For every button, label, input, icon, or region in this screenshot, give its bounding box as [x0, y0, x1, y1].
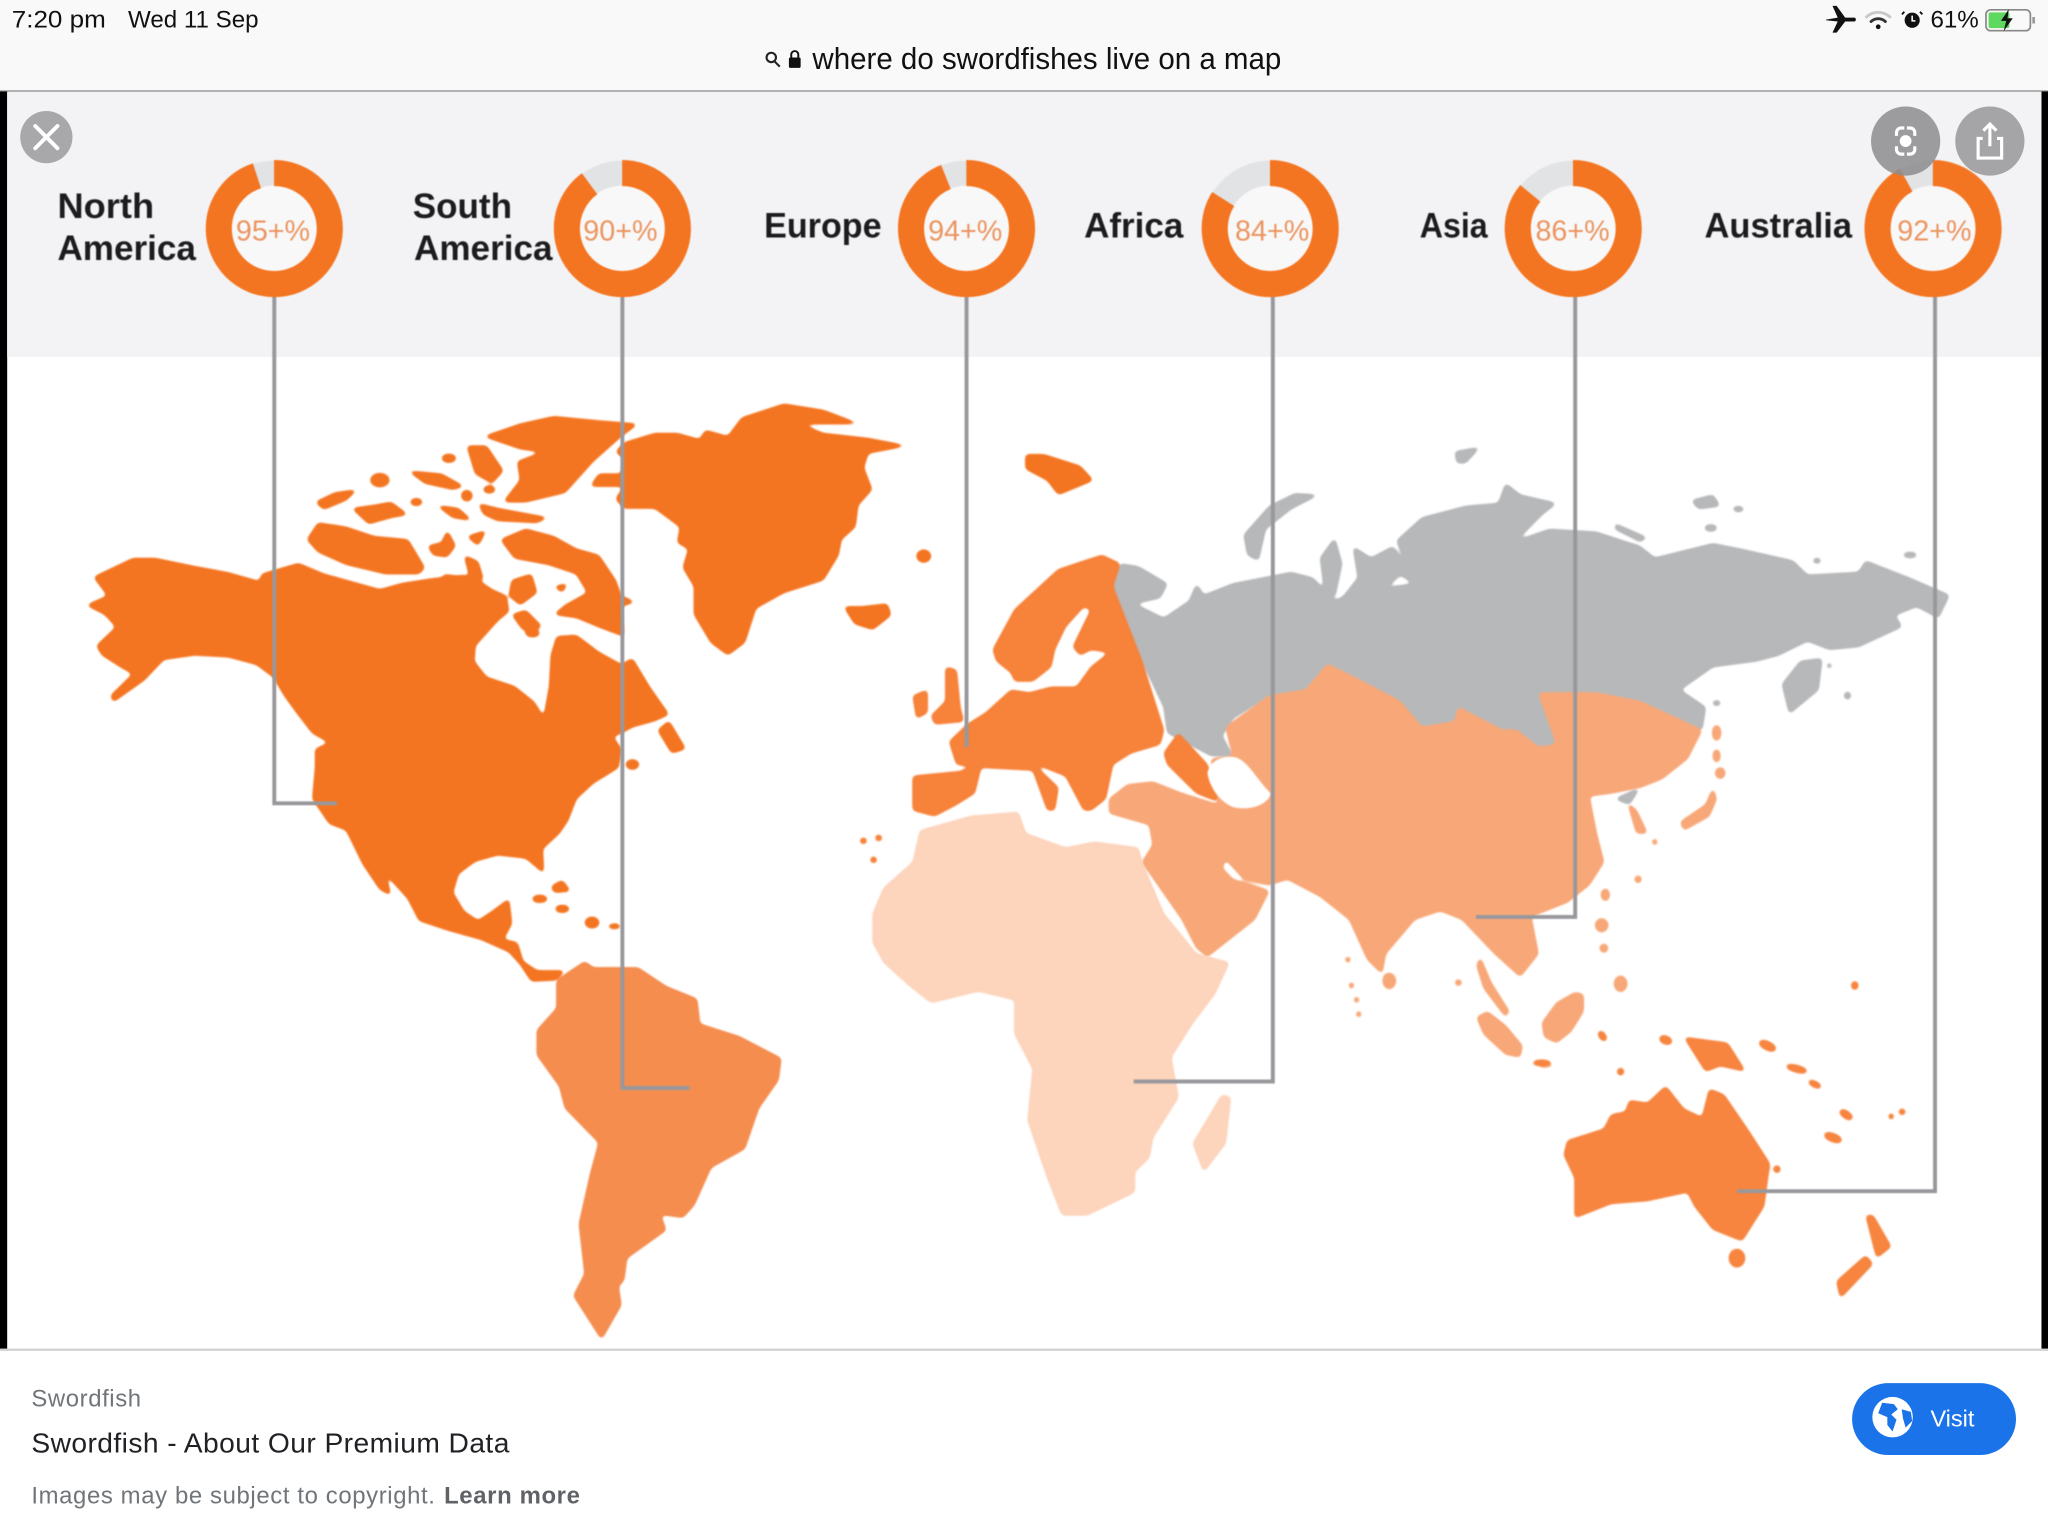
donut [567, 173, 678, 284]
footer panel [0, 1349, 2048, 1536]
region: South America [537, 961, 781, 1339]
copyright note: Learn more [444, 1482, 580, 1509]
stat: Africa [1084, 173, 1326, 284]
status time and date: 7:20 pm [12, 6, 106, 33]
button: visit [1852, 1383, 2016, 1455]
button: share [1955, 106, 2024, 176]
label: Asia [1420, 207, 1488, 246]
Newfoundland and Caribbean [532, 721, 686, 929]
donut: 84+% [1235, 215, 1309, 247]
Greenland [590, 404, 907, 655]
icon: airplane [1826, 6, 1856, 33]
icon: globe [1872, 1397, 1913, 1437]
region: Australia and Oceania [1532, 981, 1906, 1298]
label: South [413, 187, 512, 226]
label: Australia [1704, 207, 1852, 246]
icon: alarm [1902, 12, 1922, 28]
region: North America [86, 404, 907, 981]
icon: battery charging [1986, 9, 2035, 31]
icon: lock [789, 51, 801, 68]
world map [86, 404, 1949, 1339]
label: America [57, 229, 196, 268]
donut [219, 173, 330, 284]
label: Europe [764, 207, 882, 246]
donut: 86+% [1535, 215, 1610, 247]
connector lines [274, 295, 1935, 1191]
donut [911, 173, 1022, 284]
stat: Europe [764, 173, 1022, 284]
donut [1518, 173, 1629, 284]
label [413, 187, 553, 268]
stat: Asia [1420, 173, 1629, 284]
region: Africa [873, 812, 1231, 1215]
button: visit: Visit [1930, 1405, 1975, 1431]
icon: search [767, 53, 780, 67]
donut: 92+% [1897, 215, 1972, 247]
donut: 95+% [236, 215, 310, 247]
source name: Swordfish [31, 1386, 141, 1413]
stat: North America [57, 173, 330, 284]
label [57, 187, 196, 268]
region: Russia (no data) [1113, 447, 1949, 805]
label: America [414, 229, 553, 268]
North America mainland [86, 558, 669, 981]
donut: 90+% [583, 215, 658, 247]
browser top bar [0, 0, 2048, 92]
region: Europe [844, 454, 1218, 863]
button: close [20, 111, 72, 163]
donut [1215, 173, 1326, 284]
donut: 94+% [928, 215, 1002, 247]
donut [1878, 173, 1989, 284]
region: Asia [1109, 664, 1725, 1068]
page title: Swordfish - About Our Premium Data [31, 1426, 510, 1458]
Asian islands [1345, 725, 1725, 1068]
Arctic islands [307, 416, 638, 637]
status time and date [12, 6, 259, 33]
copyright note: Images may be subject to copyright. [31, 1482, 435, 1509]
status time and date: Wed 11 Sep [128, 6, 259, 33]
header band [7, 92, 2041, 357]
battery percentage: 61% [1930, 6, 1979, 33]
stat: Australia [1704, 173, 1989, 284]
button: visual search [1871, 106, 1940, 176]
stat: South America [413, 173, 678, 284]
address text: where do swordfishes live on a map [811, 43, 1281, 76]
label: North [57, 187, 154, 226]
icon: wifi [1866, 12, 1890, 29]
label: Africa [1084, 207, 1184, 246]
Caspian Sea [1207, 757, 1271, 808]
